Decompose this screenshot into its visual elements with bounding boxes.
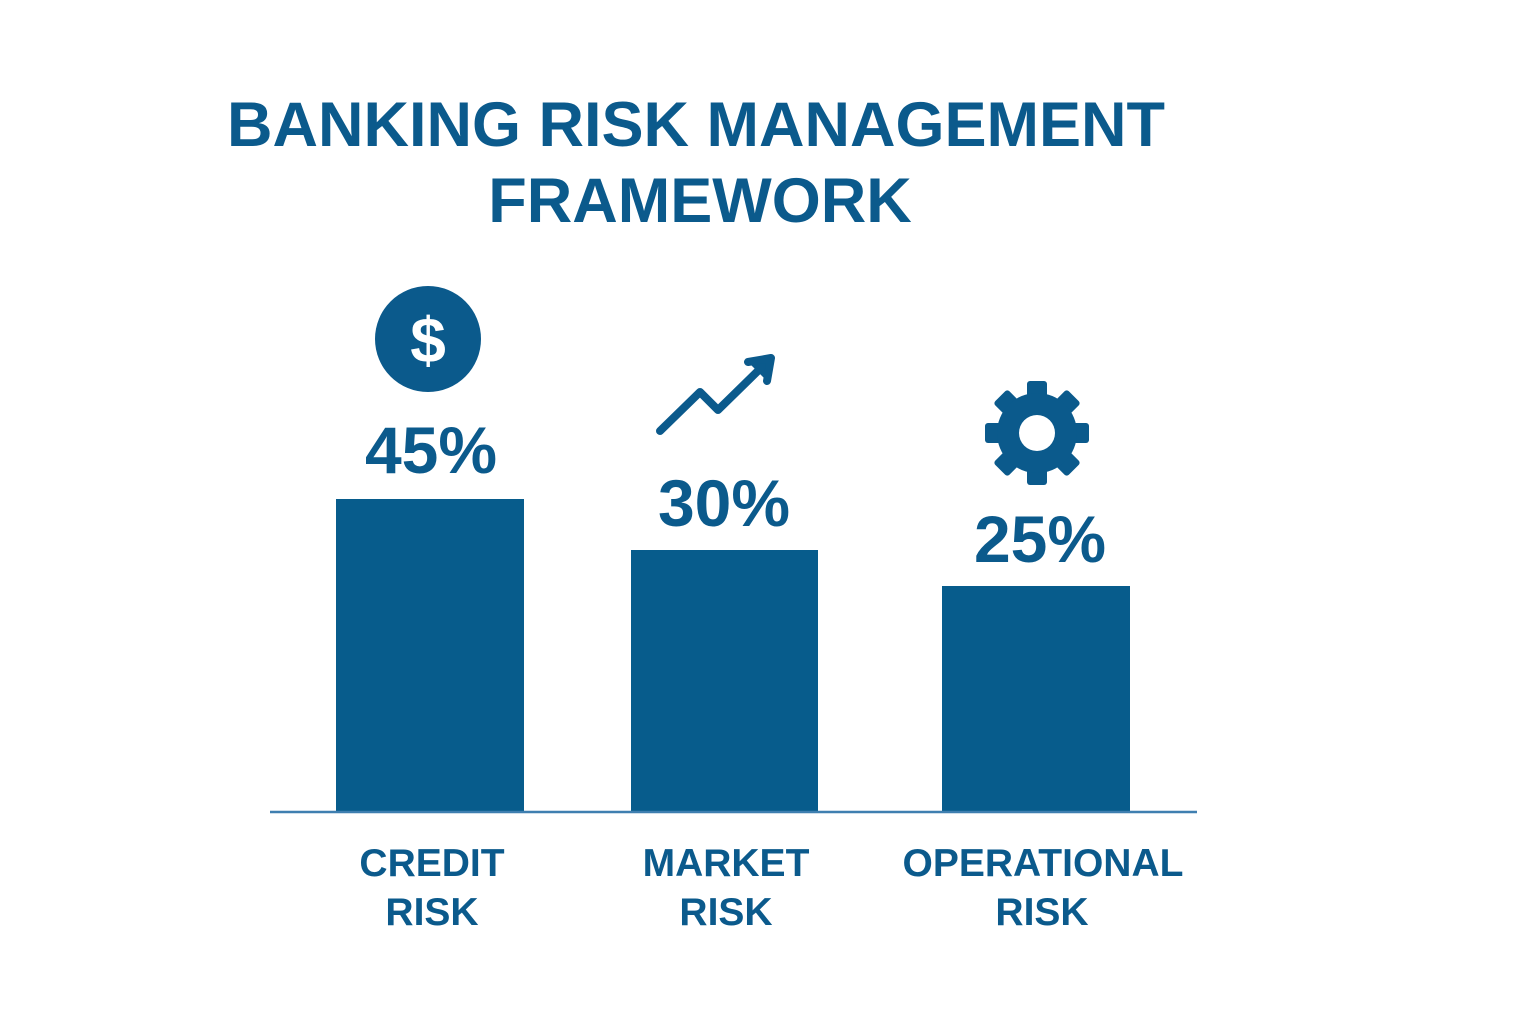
category labels: RISK — [385, 891, 479, 934]
icon: trend arrow — [660, 358, 771, 431]
category labels: RISK — [995, 891, 1089, 934]
bar: credit risk — [336, 413, 524, 813]
title — [227, 90, 1165, 236]
category labels: MARKET — [643, 842, 810, 885]
bar: credit risk: 45% — [365, 413, 497, 487]
category labels: OPERATIONAL — [903, 842, 1183, 885]
category labels — [359, 842, 1183, 934]
title: BANKING RISK MANAGEMENT — [227, 90, 1165, 160]
bar: market risk: 30% — [658, 466, 790, 540]
bar: operational risk — [942, 502, 1130, 813]
bar: market risk — [631, 466, 818, 813]
bar chart — [270, 413, 1197, 813]
title: FRAMEWORK — [488, 166, 912, 236]
bar: operational risk: 25% — [974, 502, 1106, 576]
icon: gear — [985, 381, 1089, 485]
category labels: CREDIT — [359, 842, 505, 885]
icon: dollar coin — [375, 286, 481, 392]
category labels: RISK — [679, 891, 773, 934]
icon: dollar coin: $ — [410, 304, 446, 376]
